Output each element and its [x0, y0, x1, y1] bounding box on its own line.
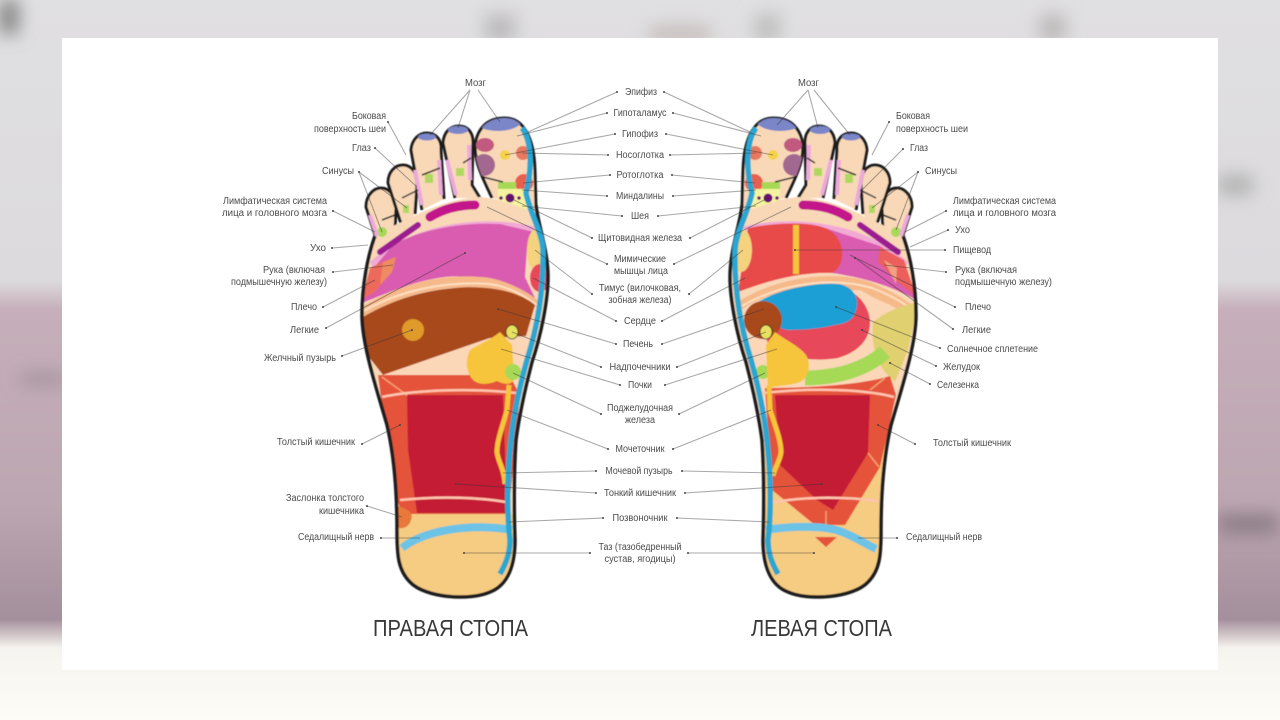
center labels: Тимус (вилочковая,: [599, 283, 681, 294]
foot diagrams: [358, 109, 918, 600]
white panel: [62, 38, 1218, 670]
left foot: [730, 109, 918, 600]
center labels: Позвоночник: [612, 513, 668, 524]
right foot labels: Желчный пузырь: [264, 353, 336, 364]
small intestine left: [775, 395, 870, 510]
kidney and ureter: [467, 332, 514, 384]
right foot base: [362, 197, 548, 597]
left foot labels: Ухо: [955, 225, 970, 236]
red shoulder zone: [878, 247, 916, 296]
center labels: Мочеточник: [616, 444, 665, 455]
arm and shoulder zone: [364, 259, 396, 298]
leader lines: [323, 90, 955, 553]
lower triangle: [815, 537, 837, 547]
left foot labels: Седалищный нерв: [906, 532, 982, 543]
center labels: Поджелудочная: [607, 403, 673, 414]
pancreas: [805, 352, 885, 378]
right foot zones: [358, 221, 550, 600]
center labels: зобная железа): [608, 294, 672, 306]
spleen: [873, 302, 918, 382]
kidney: [766, 332, 809, 388]
ileocecal valve: [396, 506, 412, 528]
heart yellow zone: [737, 228, 753, 273]
center labels: Мимические: [614, 254, 666, 265]
spine: [500, 128, 543, 574]
center labels: мышцы лица: [614, 266, 668, 277]
right foot labels: Легкие: [290, 325, 319, 336]
heel zone: [398, 513, 514, 596]
liver zone: [358, 287, 535, 375]
leader line dots: [323, 92, 955, 553]
center labels: Эпифиз: [625, 86, 657, 98]
left foot labels: [798, 78, 1056, 543]
left foot labels: Рука (включая: [955, 265, 1017, 276]
center labels: Мочевой пузырь: [606, 466, 672, 477]
left foot labels: Синусы: [925, 166, 957, 177]
center labels: Тонкий кишечник: [604, 488, 677, 499]
right foot labels: Заслонка толстого: [286, 493, 364, 504]
right foot labels: [222, 78, 486, 543]
peach upper abdomen: [852, 290, 875, 298]
right foot outline: [362, 205, 548, 597]
esophagus bar: [793, 225, 799, 274]
arc under toes: [743, 220, 908, 266]
left foot labels: Солнечное сплетение: [947, 344, 1038, 355]
left foot labels: лица и головного мозга: [953, 208, 1056, 219]
center labels: Надпочечники: [610, 362, 670, 373]
liver small: [744, 301, 782, 339]
left foot labels: Селезенка: [937, 380, 979, 391]
left foot labels: Глаз: [910, 143, 928, 154]
left foot labels: Плечо: [965, 302, 991, 313]
diaphragm band: [740, 276, 910, 310]
right foot labels: Плечо: [291, 302, 317, 313]
center labels: Щитовидная железа: [598, 233, 682, 244]
title: right foot: ПРАВАЯ СТОПА: [373, 615, 529, 641]
left foot labels: Желудок: [943, 362, 981, 373]
left foot labels: Толстый кишечник: [933, 438, 1012, 449]
pink lung zone: [825, 228, 916, 300]
left big toe detail: [745, 109, 805, 213]
gallbladder: [402, 319, 424, 341]
big toe detail: [475, 117, 534, 210]
center labels: Почки: [628, 380, 652, 391]
left foot pads: [803, 205, 848, 217]
left toe details: [757, 126, 908, 237]
left foot outline: [730, 205, 916, 597]
left foot labels: поверхность шеи: [896, 124, 968, 135]
center labels: Гипофиз: [622, 128, 658, 140]
adrenal: [760, 325, 772, 339]
right foot labels: Ухо: [310, 243, 326, 254]
right foot labels: подмышечную железу): [231, 277, 327, 288]
arc under toes: [370, 220, 536, 267]
right foot labels: кишечника: [319, 506, 364, 517]
right foot labels: лица и головного мозга: [222, 208, 327, 219]
stomach red zone: [766, 294, 870, 360]
left foot labels: Боковая: [896, 111, 930, 122]
large intestine left: [765, 376, 896, 525]
solar plexus blue: [757, 284, 857, 330]
center labels: Печень: [623, 339, 653, 350]
sciatic nerve: [402, 527, 512, 548]
heel zone left: [763, 440, 886, 596]
center labels: железа: [625, 415, 655, 426]
right foot labels: Боковая: [352, 111, 386, 122]
left foot labels: подмышечную железу): [955, 277, 1052, 288]
red lung zone: [738, 224, 842, 292]
left foot toes: [742, 118, 912, 238]
left foot base: [730, 197, 916, 597]
right foot: [358, 109, 550, 600]
heart zone: [526, 228, 541, 270]
right foot labels: Мозг: [465, 78, 486, 89]
lung zone: [362, 224, 535, 303]
center labels: [598, 86, 682, 565]
center labels: Гипоталамус: [614, 108, 666, 119]
right foot labels: Лимфатическая система: [223, 195, 327, 207]
right foot labels: Синусы: [322, 166, 354, 177]
intestine fold lines: [756, 390, 894, 397]
right foot pads: [430, 205, 475, 217]
center labels: Сердце: [624, 316, 656, 327]
right foot toes: [366, 118, 536, 238]
right foot labels: поверхность шеи: [314, 124, 386, 135]
large intestine right: [378, 375, 520, 520]
small intestine right: [407, 395, 507, 513]
sciatic nerve: [766, 527, 876, 549]
right foot labels: Седалищный нерв: [298, 532, 374, 543]
left foot labels: Мозг: [798, 78, 819, 89]
left foot zones: [730, 221, 918, 600]
left foot labels: Лимфатическая система: [953, 195, 1056, 207]
right foot labels: Рука (включая: [263, 265, 325, 276]
diaphragm band: [360, 276, 540, 320]
left foot labels: Легкие: [962, 325, 991, 336]
pancreas dot: [505, 364, 521, 380]
left foot labels: Пищевод: [953, 245, 991, 256]
center labels: Ротоглотка: [616, 170, 664, 181]
right foot labels: Толстый кишечник: [277, 437, 356, 448]
adrenal: [506, 325, 518, 339]
toe details: [370, 126, 521, 237]
center labels: Миндалины: [616, 191, 664, 202]
center labels: Шея: [631, 211, 649, 222]
left foot spine: [735, 128, 778, 574]
center labels: сустав, ягодицы): [604, 554, 676, 565]
center labels: Таз (тазобедренный: [598, 541, 682, 553]
center labels: Носоглотка: [616, 150, 664, 161]
intestine fold lines: [382, 390, 524, 397]
right foot labels: Глаз: [352, 143, 371, 154]
title: left foot: ЛЕВАЯ СТОПА: [751, 615, 893, 641]
ureter: [769, 385, 781, 476]
peach zone below liver: [383, 338, 490, 376]
